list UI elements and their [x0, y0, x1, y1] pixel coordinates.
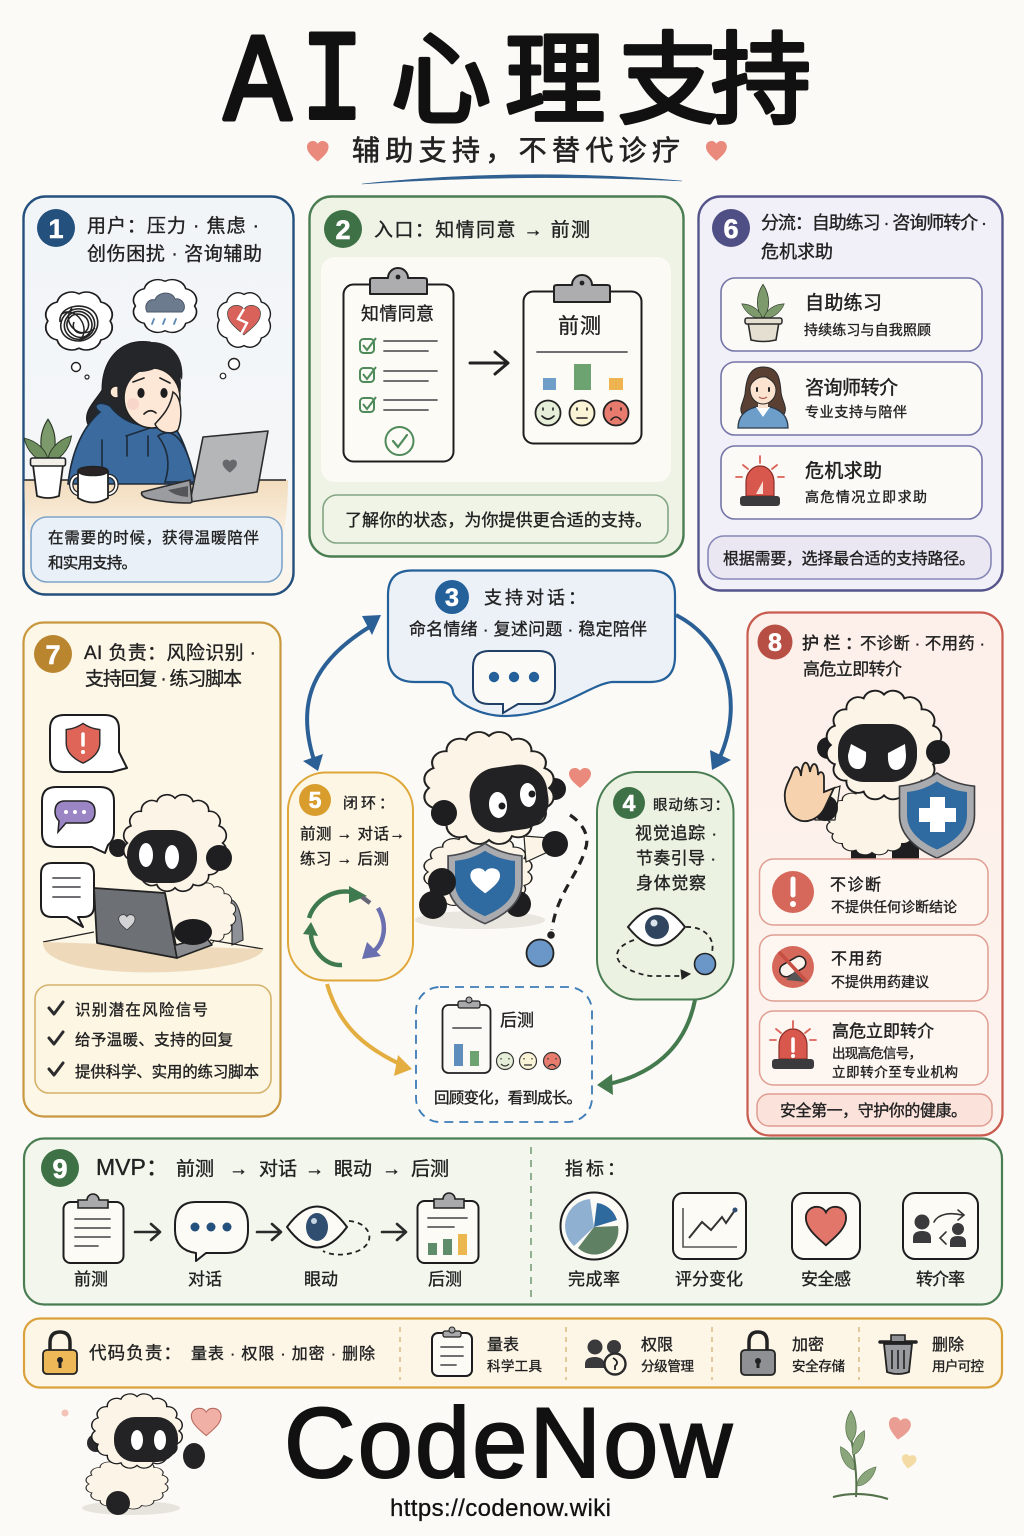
icon: pale heart — [901, 1454, 917, 1469]
metric: sense of safety: 安全感 — [801, 1270, 851, 1289]
panel 1 heading: 用户：压力 · 焦虑 · — [87, 215, 259, 237]
step: eye movement — [287, 1206, 369, 1289]
divider — [400, 1327, 859, 1380]
step: dialogue bubble: 对话 — [188, 1270, 222, 1289]
panel 8: guardrails — [748, 612, 1002, 1136]
MVP flow heading: 对话 — [259, 1158, 297, 1180]
badge 8 — [758, 624, 792, 660]
step: pre-test clipboard — [64, 1194, 124, 1289]
callout: suitable support — [323, 495, 668, 543]
panel 1: user — [20, 196, 293, 594]
rule: immediate referral: 高危立即转介 — [832, 1022, 934, 1041]
badge 2 — [324, 210, 362, 248]
panel 7 heading: 支持回复 · 练习脚本 — [85, 668, 242, 690]
step: dialogue bubble — [175, 1202, 248, 1289]
metric: completion rate: 完成率 — [568, 1270, 620, 1289]
item: permissions — [585, 1336, 694, 1374]
option: counselor referral: 咨询师转介 — [805, 377, 898, 399]
title — [224, 0, 811, 157]
item: deletion: 用户可控 — [932, 1358, 984, 1374]
badge 4: 4 — [623, 790, 636, 816]
badge 5: 5 — [309, 787, 322, 813]
panel 3: supportive dialogue — [388, 570, 675, 716]
badge 9: 9 — [52, 1154, 68, 1184]
panel 7 heading: AI 负责：风险识别 · — [84, 642, 256, 664]
callout: suitable support: 了解你的状态，为你提供更合适的支持。 — [345, 511, 652, 530]
inner white panel — [321, 257, 671, 482]
badge 1 — [37, 209, 75, 247]
clipboard: pre-test — [524, 275, 642, 444]
icon: counselor — [738, 367, 788, 428]
icon: eye with tracking ball — [617, 908, 716, 979]
panel 8 heading: 不诊断 · 不用药 · — [860, 634, 985, 653]
code duty heading: 代码负责： — [89, 1343, 181, 1363]
option: counselor referral — [721, 362, 982, 435]
clipboard: informed consent — [344, 268, 454, 462]
table — [24, 480, 288, 540]
badge 5 — [299, 784, 331, 816]
metric: score change: 评分变化 — [675, 1270, 743, 1289]
MVP flow heading: 后测 — [411, 1158, 449, 1180]
arrow: closure to post-test — [327, 984, 412, 1076]
item: encryption: 安全存储 — [792, 1358, 845, 1374]
swoosh underline — [362, 175, 682, 184]
panel 2: entry — [310, 196, 684, 556]
item: scale: 量表 — [487, 1336, 519, 1354]
icon: coral heart — [887, 1416, 912, 1441]
icon: cycle arrows — [303, 886, 384, 965]
illustration: potted plant — [20, 419, 76, 498]
rule: no diagnosis: 不诊断 — [830, 876, 881, 894]
metric: score change — [673, 1193, 746, 1289]
rule: no medication: 不用药 — [831, 950, 882, 968]
panel 1 heading — [87, 215, 262, 265]
badge 3 — [435, 580, 469, 614]
badge 7: 7 — [45, 640, 61, 670]
panel 7 heading — [84, 642, 256, 690]
illustration: laptop — [142, 431, 268, 503]
panel 7: AI responsibilities — [24, 622, 280, 1116]
rule: no medication — [760, 935, 988, 1001]
checklist — [35, 985, 271, 1093]
callout: best path: 根据需要，选择最合适的支持路径。 — [723, 550, 975, 568]
panel 8 heading: 护栏： — [802, 634, 862, 653]
option: crisis help: 危机求助 — [805, 460, 882, 482]
badge 9 — [41, 1149, 79, 1187]
subtitle — [307, 135, 727, 184]
badge 1: 1 — [48, 214, 64, 244]
metric: completion rate — [560, 1192, 628, 1289]
subtitle: 辅助支持，不替代诊疗 — [352, 135, 680, 166]
illustration: sheep at laptop — [43, 795, 263, 972]
code duty heading — [89, 1343, 375, 1363]
icon: warning — [772, 871, 814, 913]
badge 6: 6 — [723, 214, 739, 244]
item: scale — [432, 1327, 542, 1376]
option: self-help practice — [721, 278, 982, 351]
step: pre-test clipboard: 前测 — [74, 1270, 108, 1289]
item: permissions: 权限 — [641, 1336, 673, 1354]
metric: sense of safety — [792, 1193, 860, 1289]
icon: post-test clipboard — [442, 997, 490, 1073]
step: post-test clipboard — [418, 1193, 478, 1289]
badge 6 — [712, 209, 750, 247]
clipboard: pre-test: 前测 — [558, 315, 601, 338]
panel 3 heading: 支持对话： — [484, 588, 586, 608]
rule: no diagnosis — [760, 859, 988, 925]
MVP flow heading: → — [305, 1159, 324, 1180]
loop arrow: dialogue to closure — [303, 615, 381, 771]
checklist: 识别潜在风险信号 — [75, 1001, 208, 1019]
panel 6 heading — [761, 213, 987, 262]
panel 5: closed loop — [288, 772, 413, 980]
badge 4 — [613, 787, 645, 819]
MVP flow heading: MVP： — [96, 1154, 169, 1180]
illustration: central sheep with shield — [415, 732, 568, 929]
post-test box: 后测 — [500, 1011, 534, 1030]
icon: siren — [736, 456, 784, 506]
MVP flow heading: 眼动 — [334, 1158, 372, 1180]
panel 5 loop text — [300, 825, 405, 868]
panel 4 list: 视觉追踪 · — [635, 824, 717, 843]
panel 5 heading: 闭环： — [343, 795, 394, 812]
checklist: 提供科学、实用的练习脚本 — [75, 1063, 259, 1081]
panel 10: code responsibilities — [24, 1318, 1002, 1388]
step: eye movement: 眼动 — [304, 1270, 338, 1289]
item: encryption — [741, 1332, 845, 1375]
icon: chat bubble — [473, 651, 555, 713]
dotted ball path — [526, 815, 587, 966]
panel 8 heading: 高危立即转介 — [803, 660, 902, 679]
icon: no pills — [772, 946, 814, 988]
option: self-help practice: 自助练习 — [805, 292, 882, 314]
arrow — [470, 352, 508, 374]
item: permissions: 分级管理 — [641, 1359, 694, 1374]
option: crisis help: 高危情况立即求助 — [805, 489, 927, 505]
badge 7 — [34, 635, 72, 673]
panel 4 heading: 眼动练习： — [653, 797, 729, 814]
badge 3: 3 — [445, 584, 459, 612]
divider — [530, 1147, 532, 1302]
icon: gold lock — [43, 1332, 77, 1374]
callout: safety first: 安全第一，守护你的健康。 — [780, 1102, 967, 1120]
badge 8: 8 — [768, 629, 782, 657]
MVP flow heading: → — [229, 1159, 248, 1180]
footer mascot — [62, 1394, 221, 1515]
panel 4 list: 身体觉察 — [636, 874, 706, 893]
checklist: 给予温暖、支持的回复 — [75, 1031, 233, 1049]
item: encryption: 加密 — [792, 1336, 824, 1354]
panel 9: MVP and metrics — [24, 1138, 1002, 1304]
arrow: eye movement to post-test — [597, 1000, 695, 1095]
illustration: worried woman — [68, 342, 196, 484]
callout: warm companionship — [31, 517, 282, 582]
option: counselor referral: 专业支持与陪伴 — [805, 404, 907, 420]
bubble: chat — [42, 787, 114, 853]
thought bubble: rain cloud — [134, 280, 196, 332]
rule: immediate referral: 立即转介至专业机构 — [832, 1065, 958, 1080]
icon: heart left — [307, 141, 329, 162]
panel 8 heading — [802, 634, 985, 679]
illustration: guardian sheep — [785, 691, 974, 859]
callout: warm companionship: 和实用支持。 — [48, 554, 137, 572]
callout: warm companionship: 在需要的时候，获得温暖陪伴 — [48, 529, 259, 547]
icon: pink heart — [191, 1408, 221, 1436]
option: self-help practice: 持续练习与自我照顾 — [804, 322, 931, 338]
clipboard: informed consent: 知情同意 — [361, 304, 434, 324]
arrow — [382, 1224, 406, 1240]
MVP flow heading: → — [382, 1159, 401, 1180]
icon: small heart — [569, 768, 591, 788]
panel 1 heading: 创伤困扰 · 咨询辅助 — [87, 243, 262, 265]
loop arrow: dialogue to eye movement — [676, 615, 731, 770]
metric: referral rate — [903, 1193, 978, 1289]
title: 心理支持 — [391, 0, 811, 144]
step: post-test clipboard: 后测 — [428, 1270, 462, 1289]
title: A — [224, 12, 292, 145]
thought bubble: broken heart — [218, 293, 270, 379]
panel 4: eye movement — [597, 772, 734, 1000]
item: deletion: 删除 — [932, 1336, 964, 1354]
illustration: sprout and hearts — [833, 1410, 917, 1499]
icon: heart right — [706, 141, 727, 161]
panel 6: triage — [698, 196, 1002, 590]
panel 3 description: 命名情绪 · 复述问题 · 稳定陪伴 — [409, 620, 647, 639]
option: crisis help — [721, 446, 982, 519]
website URL: https://codenow.wiki — [390, 1495, 611, 1522]
rule: immediate referral — [760, 1011, 988, 1085]
panel 4 list — [635, 824, 717, 893]
metrics heading: 指标： — [565, 1159, 625, 1179]
panel 5 loop text: 练习 → 后测 — [300, 850, 389, 868]
item: deletion — [880, 1335, 984, 1374]
bubble: risk shield — [50, 715, 127, 772]
MVP flow heading: 前测 — [176, 1158, 214, 1180]
bubble: script lines — [41, 863, 94, 927]
rule: immediate referral: 出现高危信号， — [832, 1045, 922, 1061]
title: I — [300, 13, 365, 157]
panel 5 loop text: 前测 → 对话→ — [300, 825, 405, 843]
metric: referral rate: 转介率 — [916, 1270, 965, 1289]
panel 6 heading: 分流：自助练习 · 咨询师转介 · — [761, 213, 987, 233]
callout: best path — [708, 536, 991, 579]
rule: no medication: 不提供用药建议 — [831, 974, 929, 990]
badge 2: 2 — [335, 215, 351, 245]
panel 6 heading: 危机求助 — [761, 242, 833, 262]
thought bubble: tangled thoughts — [46, 292, 112, 379]
code duty heading: 量表 · 权限 · 加密 · 删除 — [191, 1345, 375, 1363]
icon: potted plant — [739, 284, 787, 342]
post-test box: 回顾变化，看到成长。 — [434, 1089, 582, 1107]
illustration: coffee mug — [71, 466, 116, 502]
brand wordmark: CodeNow — [284, 1387, 732, 1498]
arrow — [135, 1224, 160, 1240]
icon: mood faces — [496, 1052, 560, 1070]
post-test box — [416, 987, 592, 1122]
callout: safety first — [757, 1094, 992, 1126]
panel 4 list: 节奏引导 · — [636, 849, 716, 868]
panel 2 heading: 入口：知情同意 → 前测 — [374, 219, 590, 241]
arrow — [257, 1224, 281, 1240]
rule: no diagnosis: 不提供任何诊断结论 — [831, 899, 957, 915]
icon: alarm — [770, 1021, 816, 1069]
item: scale: 科学工具 — [487, 1359, 542, 1374]
